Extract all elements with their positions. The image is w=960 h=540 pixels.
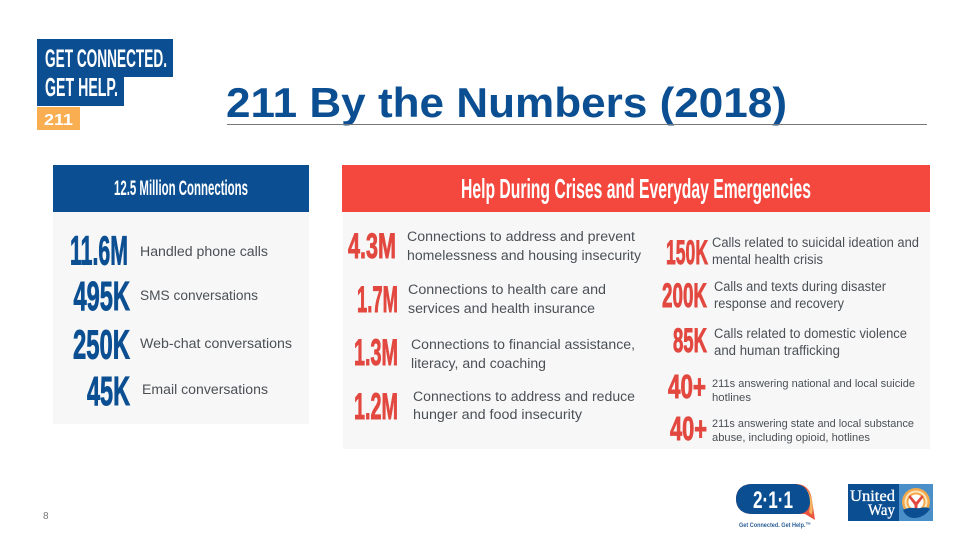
logo: United Way: Way xyxy=(868,502,895,519)
logo: 2-1-1 speech bubble: Get Connected. Get Help.™ xyxy=(739,522,811,529)
logo: get connected get help 211: GET HELP. xyxy=(45,72,118,102)
stat: suicide hotlines: 40+ xyxy=(668,368,706,405)
stat: SMS conversations xyxy=(74,273,258,319)
stat: health care: Connections to health care and xyxy=(408,282,606,297)
stat: web-chat conversations xyxy=(73,322,292,368)
panel: help during crises xyxy=(342,165,930,449)
stat: email conversations xyxy=(87,368,268,414)
stat: substance abuse hotlines: abuse, including opioid, hotlines xyxy=(712,432,870,444)
stat: suicide hotlines xyxy=(668,368,915,405)
logo: United Way: United xyxy=(850,488,895,505)
panel heading: connections: 12.5 Million Connections xyxy=(114,177,248,200)
stat: financial assistance xyxy=(354,332,635,373)
stat: hunger xyxy=(354,386,635,427)
stat: disaster response: response and recovery xyxy=(714,296,844,311)
title: 211 By the Numbers (2018) xyxy=(226,79,787,126)
stat: hunger: Connections to address and reduce xyxy=(413,389,635,404)
stat: disaster response: Calls and texts during disaster xyxy=(714,279,886,294)
stat: domestic violence: Calls related to domestic violence xyxy=(714,326,907,341)
stat: substance abuse hotlines xyxy=(670,410,914,447)
stat: email conversations: 45K xyxy=(87,368,130,414)
stat: email conversations: Email conversations xyxy=(142,382,268,397)
stat: web-chat conversations: Web-chat conversations xyxy=(140,336,292,351)
stat: financial assistance: literacy, and coaching xyxy=(411,356,546,371)
stat: disaster response xyxy=(662,277,886,315)
logo: get connected get help 211: GET CONNECTED. xyxy=(45,45,167,73)
stat: substance abuse hotlines: 211s answering state and local substance xyxy=(712,418,914,430)
stat: suicidal ideation: 150K xyxy=(666,234,708,272)
stat: financial assistance: 1.3M xyxy=(354,332,398,373)
stat: SMS conversations: 495K xyxy=(74,273,130,319)
stat: SMS conversations: SMS conversations xyxy=(140,288,258,303)
stat: homelessness: Connections to address and prevent xyxy=(407,229,635,244)
logo: get connected get help 211: 211 xyxy=(44,112,73,129)
stat: web-chat conversations: 250K xyxy=(73,322,130,368)
logo: United Way xyxy=(848,484,933,521)
stat: homelessness xyxy=(348,227,641,266)
stat: hunger: 1.2M xyxy=(354,386,398,427)
stat: domestic violence xyxy=(673,322,907,360)
stat: homelessness: homelessness and housing insecurity xyxy=(407,248,641,263)
stat: domestic violence: and human trafficking xyxy=(714,343,840,358)
stat: health care: services and health insurance xyxy=(408,301,595,316)
logo: 2-1-1 speech bubble: 2·1·1 xyxy=(753,487,793,514)
stat: disaster response: 200K xyxy=(662,277,707,315)
stat: substance abuse hotlines: 40+ xyxy=(670,410,707,447)
stat: handled phone calls: Handled phone calls xyxy=(140,244,268,259)
stat: suicide hotlines: 211s answering national and local suicide xyxy=(712,378,915,390)
stat: suicidal ideation xyxy=(666,234,919,272)
stat: financial assistance: Connections to financial assistance, xyxy=(411,337,635,352)
stat: hunger: hunger and food insecurity xyxy=(413,407,582,422)
stat: homelessness: 4.3M xyxy=(348,227,396,266)
logo: get connected get help 211 xyxy=(37,39,173,130)
stat: suicide hotlines: hotlines xyxy=(712,392,752,404)
stat: health care: 1.7M xyxy=(357,279,398,320)
panel: 12.5 million connections xyxy=(53,165,309,424)
stat: suicidal ideation: mental health crisis xyxy=(712,252,823,267)
stat: handled phone calls: 11.6M xyxy=(70,228,128,274)
stat: domestic violence: 85K xyxy=(673,322,707,360)
stat: handled phone calls xyxy=(70,228,268,274)
stat: health care xyxy=(357,279,606,320)
page number: 8 xyxy=(43,511,49,522)
stat: suicidal ideation: Calls related to suicidal ideation and xyxy=(712,235,919,250)
logo: 2-1-1 speech bubble xyxy=(736,484,815,529)
